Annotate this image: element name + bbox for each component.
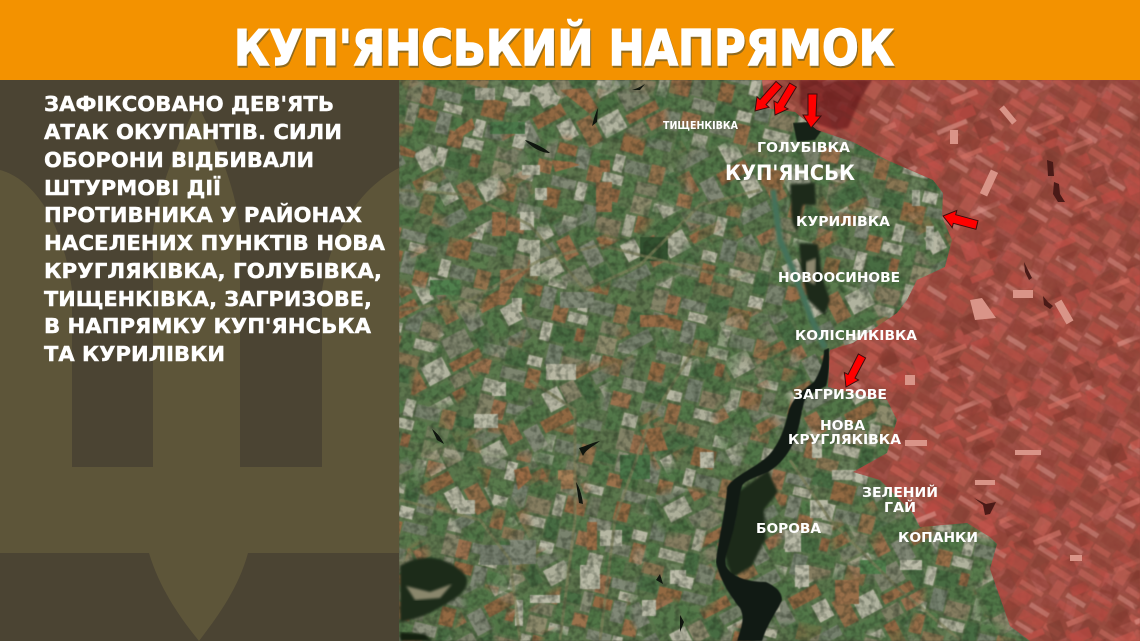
river Oskil xyxy=(716,348,829,641)
text block: attack summary: ШТУРМОВІ ДІЇ xyxy=(44,175,221,200)
water and forest features xyxy=(400,84,830,641)
text block: attack summary: КРУГЛЯКІВКА, ГОЛУБІВКА, xyxy=(44,259,382,283)
settlement labels xyxy=(663,120,978,546)
label Kupiansk: КУП'ЯНСЬК xyxy=(725,161,855,185)
title: КУП'ЯНСЬКИЙ НАПРЯМОК xyxy=(235,20,895,79)
arrow near Kurylivka xyxy=(943,210,978,229)
text block: attack summary: ОБОРОНИ ВІДБИВАЛИ xyxy=(44,148,314,172)
red occupied territory xyxy=(760,80,1140,641)
label Holubivka: ГОЛУБІВКА xyxy=(757,140,851,156)
label Nova: НОВА xyxy=(820,418,866,434)
map texture xyxy=(399,80,1140,641)
hand placed fields xyxy=(400,84,934,626)
muted olive wash over terrain xyxy=(399,80,1024,641)
dark red ponds xyxy=(974,160,1065,515)
arrow near Holubivka xyxy=(803,94,821,128)
label Hai: ГАЙ xyxy=(884,499,916,516)
text block: attack summary: ТИЩЕНКІВКА, ЗАГРИЗОВЕ, xyxy=(44,287,372,311)
label Kurylivka: КУРИЛІВКА xyxy=(796,214,891,230)
panel: satellite map xyxy=(399,80,1140,641)
header band xyxy=(0,0,1140,80)
text block: attack summary: АТАК ОКУПАНТІВ. СИЛИ xyxy=(44,120,342,144)
text block: attack summary: ТА КУРИЛІВКИ xyxy=(44,342,225,366)
label Tyshchenkivka: ТИЩЕНКІВКА xyxy=(663,120,739,132)
text block: attack summary: ЗАФІКСОВАНО ДЕВ'ЯТЬ xyxy=(44,92,334,116)
large pale fields xyxy=(905,105,1082,561)
text block: attack summary: В НАПРЯМКУ КУП'ЯНСЬКА xyxy=(44,314,371,338)
map terrain fields xyxy=(399,80,1140,641)
text block: attack summary xyxy=(44,92,385,366)
red field pattern two xyxy=(760,80,1140,641)
icon: trident watermark xyxy=(0,103,399,641)
panel: left text panel with trident xyxy=(0,80,399,641)
darker occupied patch xyxy=(800,80,872,130)
label Borova: БОРОВА xyxy=(756,521,822,537)
title: КУП'ЯНСЬКИЙ НАПРЯМОК xyxy=(234,18,894,77)
red overlay base xyxy=(760,80,1140,641)
forest bottom left xyxy=(400,558,467,622)
ponds xyxy=(432,84,684,632)
label Kolisnykivka: КОЛІСНИКІВКА xyxy=(795,328,918,344)
forests near Kupiansk xyxy=(793,122,822,142)
label Zahryzove: ЗАГРИЗОВЕ xyxy=(793,387,887,403)
arrow near Tyshchenkivka 1 xyxy=(755,81,782,111)
label Novoosynove: НОВООСИНОВЕ xyxy=(778,270,900,286)
red attack arrows xyxy=(755,81,978,387)
arrow near Tyshchenkivka 2 xyxy=(774,83,796,115)
arrow near Zahryzove xyxy=(844,354,866,387)
forests near Borova xyxy=(724,470,778,578)
text block: attack summary: НАСЕЛЕНИХ ПУНКТІВ НОВА xyxy=(44,231,385,255)
Oskil valley xyxy=(773,190,825,348)
roads and streams xyxy=(400,190,960,640)
label Kopanky: КОПАНКИ xyxy=(898,530,978,546)
label Kruhliakivka: КРУГЛЯКІВКА xyxy=(788,432,902,448)
red field pattern one xyxy=(760,80,1140,641)
text block: attack summary: ПРОТИВНИКА У РАЙОНАХ xyxy=(44,202,362,227)
label Zelenyi: ЗЕЛЕНИЙ xyxy=(862,484,938,501)
